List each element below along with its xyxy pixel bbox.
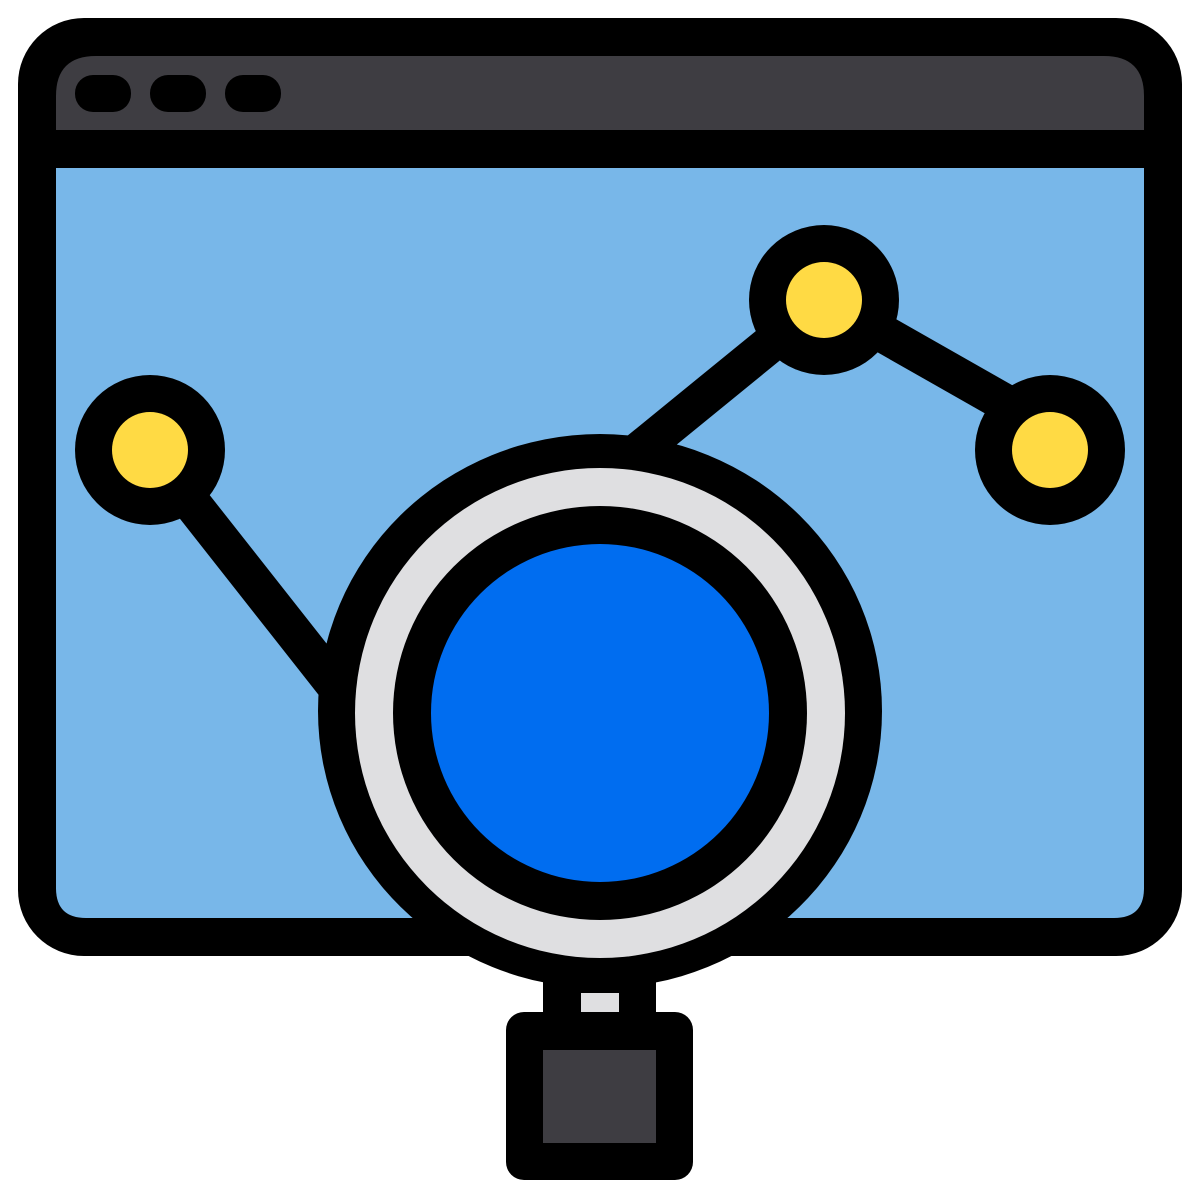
chart lines bbox=[150, 300, 1035, 685]
window control dots bbox=[75, 75, 281, 112]
browser window frame bbox=[18, 18, 1182, 956]
chart nodes bbox=[75, 225, 1125, 525]
magnifier handle bbox=[506, 970, 693, 1180]
magnifier lens bbox=[318, 434, 882, 988]
